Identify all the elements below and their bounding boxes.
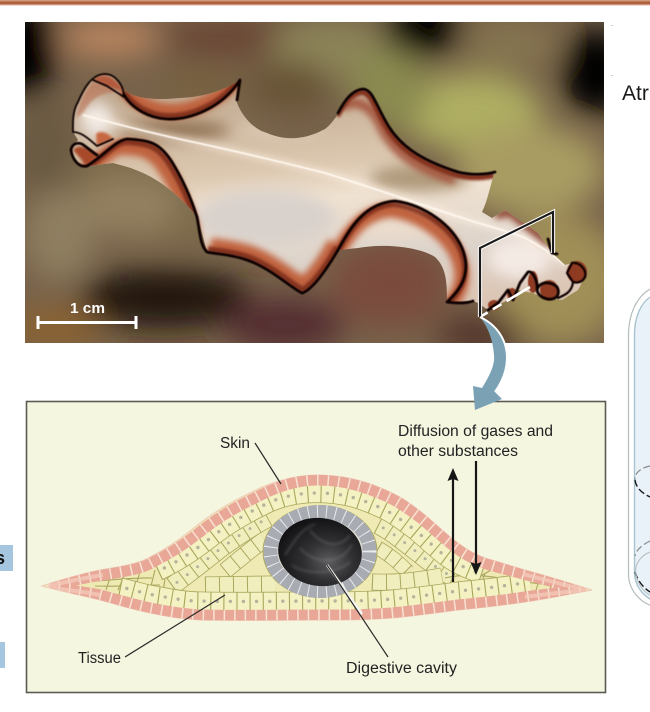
upper tissue layer [158, 493, 482, 574]
label: diffusion of gases and other substances [398, 423, 553, 460]
head colouring [73, 76, 124, 166]
label: diffusion of gases and other substances: Diffusion of gases and [398, 423, 553, 440]
lower tissue layer [120, 582, 530, 601]
label: diffusion of gases and other substances: other substances [398, 443, 518, 460]
label: skin: Skin [220, 435, 250, 452]
tissue cross-section [42, 475, 592, 620]
red rim, dark band against the edge [85, 77, 494, 305]
leader line: tissue [125, 595, 225, 657]
label: tissue: Tissue [78, 650, 121, 667]
arrow from photo to cross-section [473, 317, 507, 410]
photo background [25, 22, 604, 343]
skin cells [48, 480, 586, 615]
cross-section marker frame [480, 212, 553, 317]
tail lobes [488, 261, 587, 310]
top page border strip [0, 0, 650, 6]
photo: flatworm on blurred background [25, 22, 604, 343]
diffusion arrows [448, 461, 482, 582]
specks beside photo [611, 25, 613, 76]
flatworm body [69, 72, 588, 312]
cropped cylinder diagram [628, 288, 650, 606]
scale bar: 1 cm [38, 301, 136, 329]
digestive cavity [263, 506, 377, 598]
cropped label: Atr: Atr [622, 82, 649, 105]
inner tissue cells [75, 518, 560, 592]
midline [83, 115, 565, 265]
scale bar: 1 cm: 1 cm [70, 301, 105, 317]
cropped blue label box with letter s [0, 545, 13, 571]
panel: flatworm cross-section [26, 402, 606, 692]
shading inside the body [81, 102, 552, 278]
leader line: skin [255, 443, 281, 484]
cropped blue label box [0, 642, 5, 668]
label: digestive cavity: Digestive cavity [346, 660, 457, 677]
red rim, soft outer band [81, 72, 550, 311]
black edge lines [71, 74, 585, 310]
leader line: digestive cavity [327, 565, 388, 657]
